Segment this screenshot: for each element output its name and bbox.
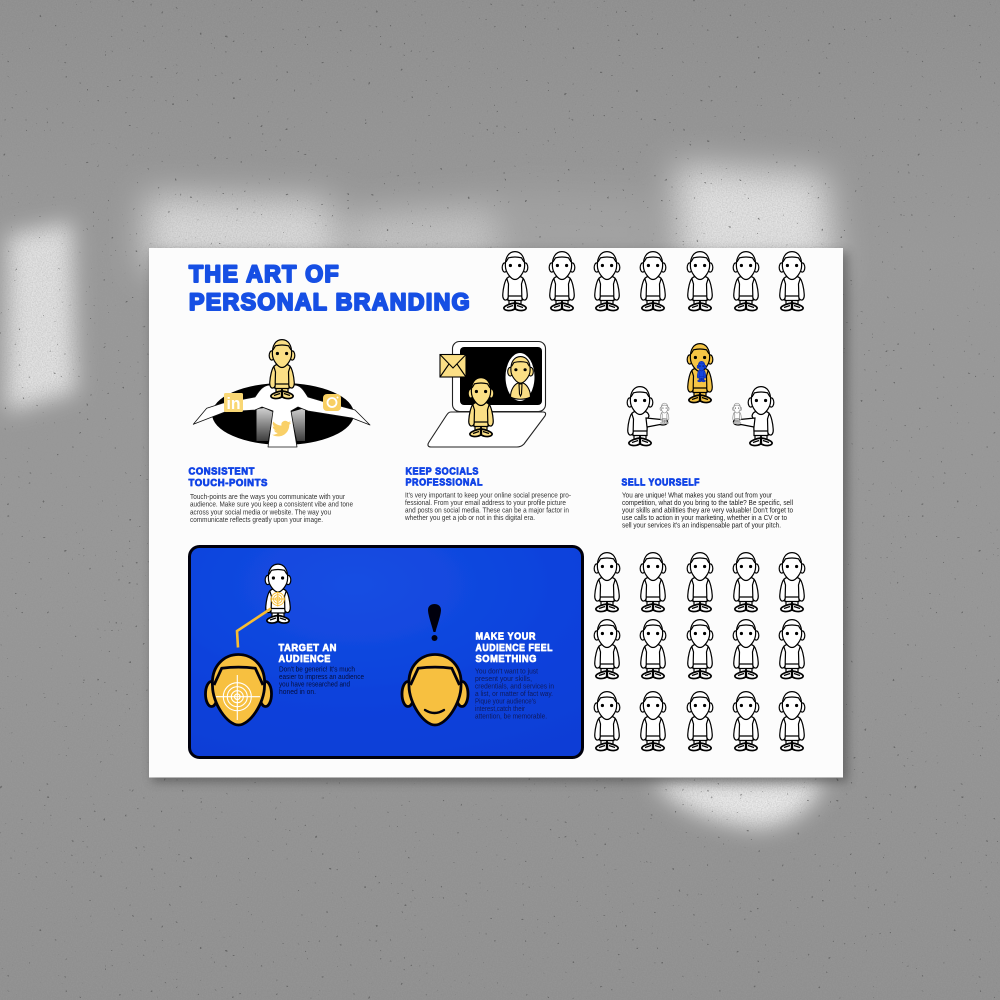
white platform: [193, 385, 370, 447]
sunlight patch below poster: [652, 780, 825, 828]
text: keep socials professional: whether you get a job or not in this digital era.: [404, 515, 535, 522]
heading: consistent touch-points: CONSISTENT: [188, 466, 255, 478]
title: PERSONAL BRANDING: [189, 289, 471, 316]
heading: consistent touch-points: [188, 466, 268, 489]
yellow figure with microphone figure: [687, 344, 713, 403]
text: sell yourself: competition, what do you bring to the table? Be specific, sell: [622, 500, 793, 507]
black hole: [212, 383, 354, 445]
text: sell yourself: sell your services it's an indispensable part of your pitch.: [622, 522, 781, 530]
left figure holding mini figure: [627, 387, 669, 446]
heading: make your audience feel something: [476, 632, 553, 665]
grid of outlined figures: [594, 553, 805, 751]
poster shadow: [152, 252, 848, 782]
icon: envelope: [440, 354, 466, 377]
laptop base: [428, 412, 546, 447]
portrait figure: [508, 357, 533, 399]
text: make your audience feel something: You don't want to just: [475, 668, 538, 676]
text: keep socials professional: and posts on social media. These can be a major factor in: [405, 508, 569, 514]
heading: consistent touch-points: TOUCH-POINTS: [188, 478, 268, 489]
heading: make your audience feel something: SOMETHING: [476, 654, 537, 665]
text: sell yourself: [622, 492, 793, 530]
text: target an audience: Don't be generic! It's much: [279, 666, 355, 674]
text: consistent touch-points: audience. Make sure you keep a consistent vibe and tone: [190, 502, 353, 508]
icon: linkedin: in: [226, 394, 240, 413]
illustration: consistent touch-points: [193, 340, 370, 447]
heading: make your audience feel something: AUDIENCE FEEL: [476, 643, 553, 654]
heading: keep socials professional: KEEP SOCIALS: [406, 466, 479, 478]
text: consistent touch-points: Touch-points are the ways you communicate with your: [190, 494, 346, 501]
text: make your audience feel something: a list, or matter of fact way.: [475, 691, 553, 698]
text: sell yourself: your skills and abilities they are very valuable! Don't forget to: [622, 508, 793, 514]
heading: keep socials professional: [406, 466, 483, 488]
text: target an audience: easier to impress an audience: [279, 674, 364, 681]
yellow figure: [269, 340, 295, 399]
text: make your audience feel something: attention, be memorable.: [475, 714, 547, 720]
text: make your audience feel something: interest,catch their: [475, 706, 526, 713]
laptop screen: [452, 342, 546, 412]
text: make your audience feel something: credentials, and services in: [475, 684, 554, 690]
yellow figure: [468, 378, 494, 437]
text: consistent touch-points: communicate reflects greatly upon your image.: [190, 517, 323, 524]
target line: [237, 608, 271, 648]
text: sell yourself: You are unique! What makes you stand out from your: [622, 492, 773, 500]
text: consistent touch-points: [190, 494, 353, 524]
top row of outlined figures: [502, 252, 805, 311]
heading: target an audience: [278, 643, 337, 665]
target figure: [265, 564, 291, 623]
poster sheet: [149, 248, 843, 778]
right figure holding mini figure: [733, 387, 774, 446]
sunlight band left: [6, 222, 76, 412]
text: make your audience feel something: Pique your audience's: [475, 698, 536, 706]
heading: sell yourself: SELL YOURSELF: [622, 478, 700, 488]
text: target an audience: you have researched and: [279, 682, 350, 688]
heading: make your audience feel something: MAKE YOUR: [476, 632, 536, 642]
portrait oval: [506, 353, 534, 401]
heading: target an audience: TARGET AN: [278, 643, 337, 654]
illustration: sell yourself: [627, 344, 774, 446]
text: target an audience: [279, 666, 364, 696]
panel: blue audience panel: [190, 546, 582, 758]
illustration: laptop: [428, 342, 546, 447]
title: [189, 261, 471, 316]
text: consistent touch-points: across your social media or website. The way you: [190, 510, 331, 516]
text: keep socials professional: It's very important to keep your online social presence pro-: [405, 492, 572, 500]
heading: keep socials professional: PROFESSIONAL: [406, 478, 483, 488]
gray shafts: [256, 408, 305, 441]
title: THE ART OF: [189, 261, 340, 288]
text: sell yourself: use calls to action in your marketing, whether in a CV or to: [622, 515, 787, 522]
text: make your audience feel something: present your skills,: [475, 676, 532, 683]
text: keep socials professional: fessional. From your email address to your profile picture: [405, 500, 566, 507]
text: target an audience: honed in on.: [279, 689, 316, 696]
icon: twitter: [272, 421, 291, 436]
head with target: [206, 654, 272, 725]
text: make your audience feel something: [475, 668, 554, 720]
icon: instagram: [323, 394, 341, 411]
head with smile: [402, 654, 468, 725]
exclamation mark: [428, 604, 441, 641]
text: keep socials professional: [404, 492, 572, 522]
heading: target an audience: AUDIENCE: [278, 654, 331, 665]
